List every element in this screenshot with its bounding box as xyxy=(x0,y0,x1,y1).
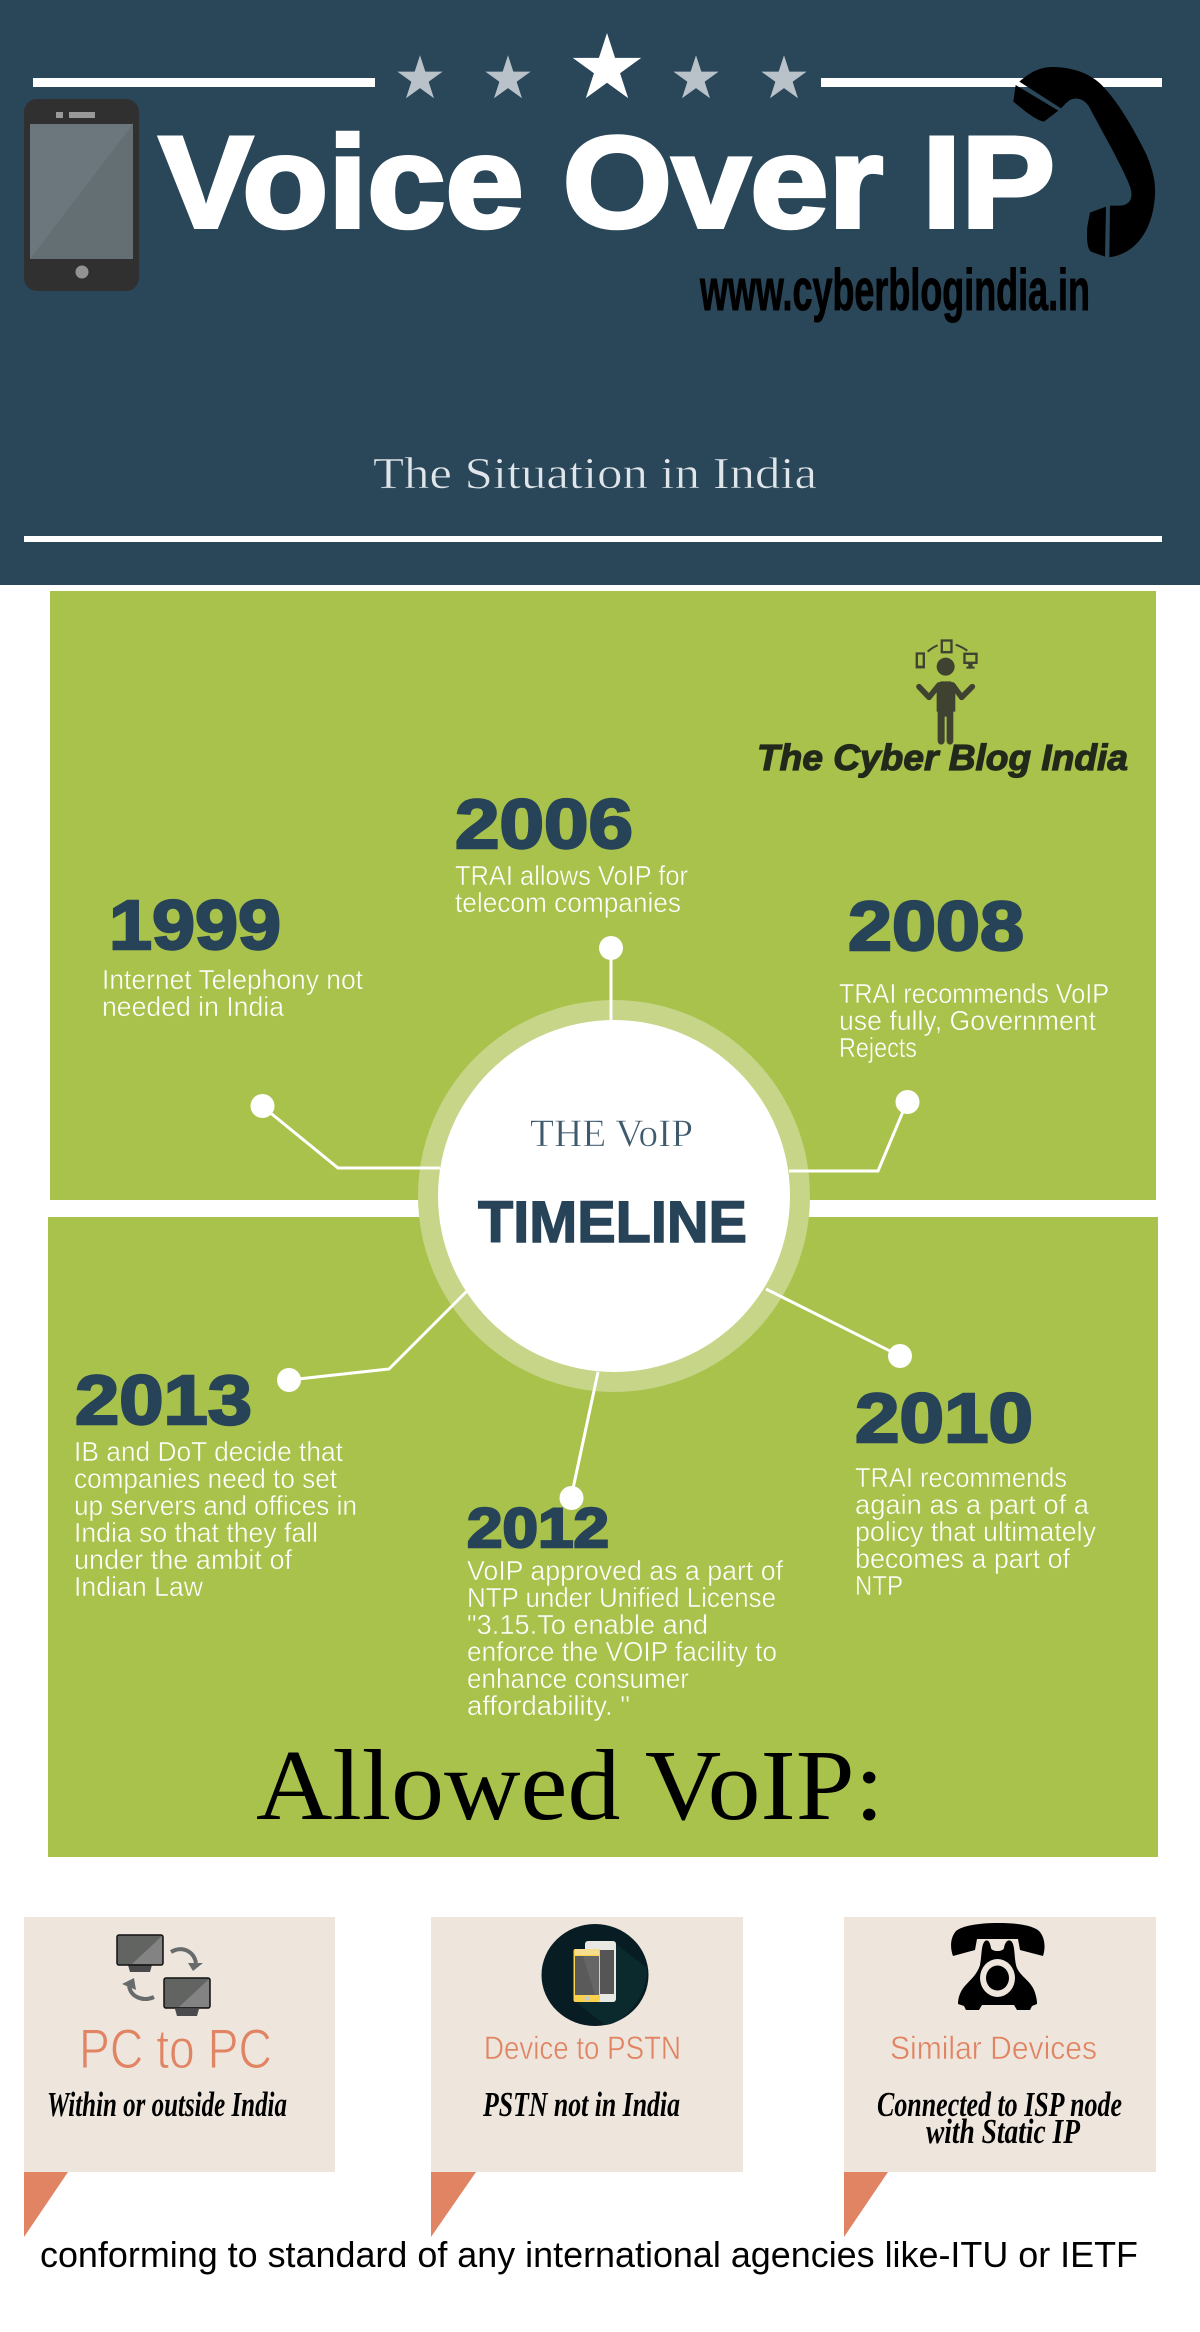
title: Voice Over IP xyxy=(159,109,1055,255)
timeline entry 2012: "3.15.To enable and xyxy=(467,1609,708,1640)
icon: person juggling devices xyxy=(916,639,978,745)
timeline entry 2010: policy that ultimately xyxy=(855,1516,1096,1547)
timeline entry 2013: India so that they fall xyxy=(74,1517,318,1548)
timeline entry 2008: Rejects xyxy=(839,1032,917,1063)
card tail xyxy=(431,2172,476,2237)
timeline entry 1999 xyxy=(102,886,363,1022)
central timeline badge xyxy=(418,1000,810,1392)
logo: The Cyber Blog India xyxy=(757,639,1128,778)
badge heading: TIMELINE xyxy=(478,1190,747,1255)
top rule left xyxy=(33,78,375,87)
footer note: conforming to standard of any international agencies like-ITU or IETF xyxy=(40,2234,1138,2275)
timeline entry 2006: 2006 xyxy=(455,785,633,863)
stars xyxy=(397,33,807,98)
card: Similar Devices xyxy=(844,1917,1156,2237)
card tail xyxy=(844,2172,888,2237)
card: Device to PSTN xyxy=(431,1917,743,2237)
timeline entry 2013 xyxy=(74,1361,357,1602)
timeline entry 2013: up servers and offices in xyxy=(74,1490,357,1521)
timeline entry 2013: IB and DoT decide that xyxy=(74,1436,343,1467)
card heading: Device to PSTN xyxy=(484,2030,681,2066)
icon: telephone handset xyxy=(1013,67,1155,257)
connector 2013 xyxy=(277,1290,468,1392)
icon: two monitors with arrows xyxy=(117,1935,210,2016)
icon: rotary telephone xyxy=(951,1923,1045,2010)
card note: PSTN not in India xyxy=(482,2085,680,2124)
timeline entry 2010 xyxy=(855,1379,1096,1601)
timeline entry 2012: affordability. " xyxy=(467,1690,630,1721)
connector 2006 xyxy=(599,936,623,1020)
icon: smartphone xyxy=(24,99,139,291)
timeline entry 2012: VoIP approved as a part of xyxy=(467,1555,783,1586)
logo wordmark: The Cyber Blog India xyxy=(757,737,1128,778)
card note: Within or outside India xyxy=(47,2085,287,2124)
timeline entry 2013: 2013 xyxy=(75,1361,252,1439)
timeline entry 2010: again as a part of a xyxy=(855,1489,1089,1520)
timeline entry 2012: enforce the VOIP facility to xyxy=(467,1636,777,1667)
timeline entry 2010: becomes a part of xyxy=(855,1543,1070,1574)
timeline entry 2006: telecom companies xyxy=(455,887,681,918)
timeline entry 2008: TRAI recommends VoIP xyxy=(839,978,1109,1009)
card: PC to PC xyxy=(24,1917,335,2237)
card heading: Similar Devices xyxy=(890,2030,1097,2066)
connector 2010 xyxy=(766,1289,912,1368)
connector 2008 xyxy=(789,1090,920,1171)
timeline entry 1999: Internet Telephony not xyxy=(102,964,363,995)
top rule right xyxy=(821,78,1162,87)
heading: Allowed VoIP: Allowed VoIP: xyxy=(256,1729,884,1841)
timeline entry 2008: 2008 xyxy=(848,887,1024,965)
timeline entry 2012 xyxy=(467,1496,783,1721)
timeline entry 2013: Indian Law xyxy=(74,1571,204,1602)
connector 1999 xyxy=(250,1094,440,1168)
connector 2012 xyxy=(560,1372,598,1510)
badge label: THE VoIP xyxy=(530,1112,693,1155)
panel: header xyxy=(0,0,1200,585)
icon: phones in circle xyxy=(542,1924,648,2026)
card heading: PC to PC xyxy=(79,2017,272,2080)
timeline entry 1999: 1999 xyxy=(109,886,281,964)
timeline entry 2010: 2010 xyxy=(855,1379,1033,1457)
card: Similar Devices: with Static IP xyxy=(926,2112,1080,2151)
timeline entry 2006: TRAI allows VoIP for xyxy=(455,860,688,891)
panel: timeline upper xyxy=(50,591,1156,1200)
timeline entry 2013: under the ambit of xyxy=(74,1544,292,1575)
timeline entry 2006 xyxy=(455,785,688,918)
card tail xyxy=(24,2172,68,2237)
timeline entry 2008 xyxy=(839,887,1109,1063)
timeline entry 2010: TRAI recommends xyxy=(855,1462,1067,1493)
subtitle: The Situation in India xyxy=(373,449,817,498)
timeline entry 1999: needed in India xyxy=(102,991,284,1022)
timeline entry 2012: NTP under Unified License xyxy=(467,1582,776,1613)
bottom rule xyxy=(24,536,1162,542)
timeline entry 2008: use fully, Government xyxy=(839,1005,1096,1036)
timeline entry 2010: NTP xyxy=(855,1570,903,1601)
panel: timeline lower xyxy=(48,1217,1158,1857)
timeline entry 2012: 2012 xyxy=(467,1496,609,1559)
card note: Connected to ISP node xyxy=(877,2085,1122,2124)
timeline entry 2012: enhance consumer xyxy=(467,1663,689,1694)
timeline entry 2013: companies need to set xyxy=(74,1463,337,1494)
